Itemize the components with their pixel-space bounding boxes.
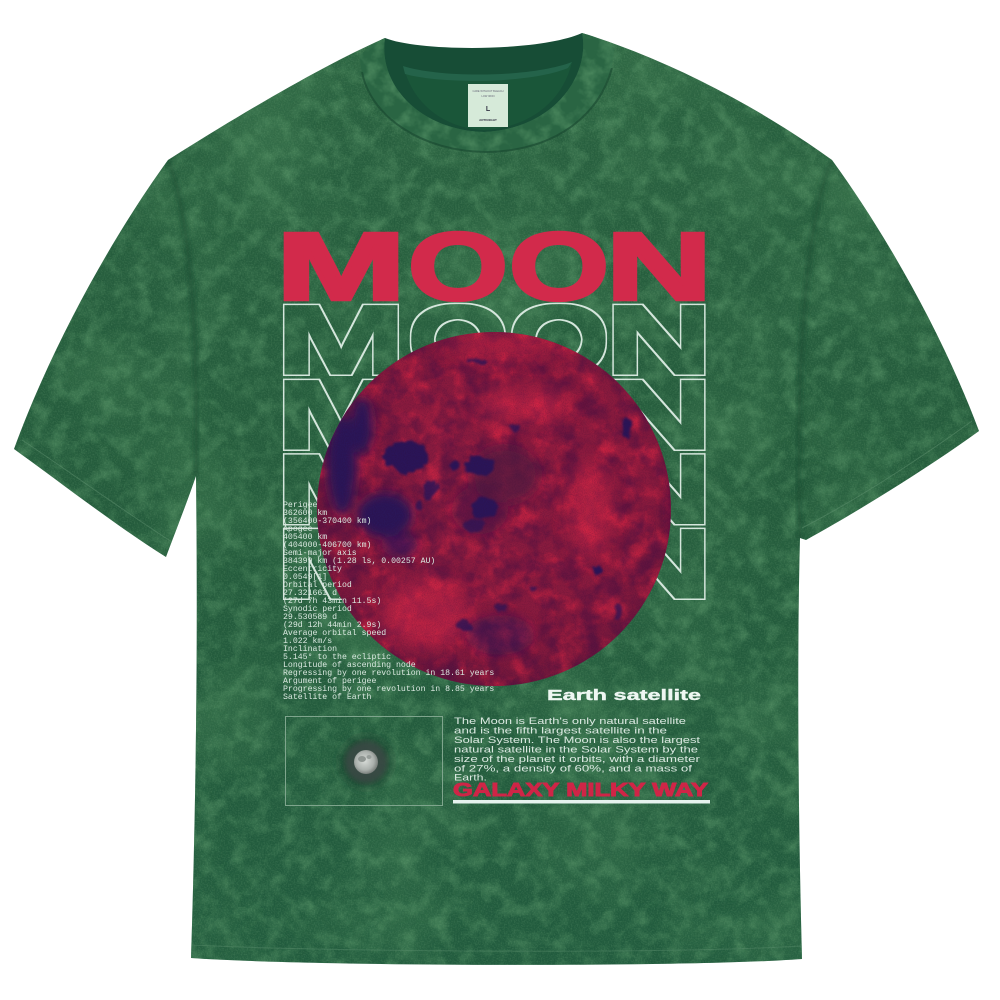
white rule [453, 800, 710, 804]
orbital data text: Progressing by one revolution in 8.85 years [283, 684, 494, 694]
orbital data text: Apogee [283, 525, 313, 534]
orbital data text: 1.022 km/s [283, 636, 332, 646]
size label: L [486, 106, 491, 113]
bright highlands [380, 335, 610, 649]
orbital data text: (356400-370400 km) [283, 516, 371, 526]
description paragraph: natural satellite in the Solar System by the [454, 744, 698, 756]
orbital data text: (27d 7h 43min 11.5s) [283, 596, 381, 606]
orbital data text: Average orbital speed [283, 628, 386, 638]
photo frame with small moon [286, 716, 442, 806]
outlined MOON stack: O [408, 437, 508, 543]
orbital data text [283, 500, 494, 702]
outlined MOON stack: N [606, 512, 712, 618]
outlined MOON stack: M [276, 437, 406, 543]
orbital data text: Semi-major axis [283, 548, 357, 558]
collar seam [362, 68, 612, 152]
title: red MOON: M [276, 214, 406, 320]
outlined MOON stack [276, 288, 712, 618]
orbital data text: 29.530589 d [283, 612, 337, 622]
inner back panel [404, 62, 572, 130]
size label: LOW IRON [481, 94, 495, 98]
orbital data text: Orbital period [283, 580, 352, 590]
orbital data text: (29d 12h 44min 2.9s) [283, 620, 381, 630]
orbital data text: Regressing by one revolution in 18.61 years [283, 668, 494, 678]
red moon illustration [310, 325, 730, 695]
title: red MOON: O [408, 214, 508, 320]
icon: small moon with halo [339, 735, 393, 789]
subtitle: GALAXY MILKY WAY: GALAXY MILKY WAY [453, 780, 708, 800]
back collar band [403, 62, 572, 81]
orbital data text: 5.145° to the ecliptic [283, 652, 391, 662]
outlined MOON stack: N [606, 437, 712, 543]
orbital data text: 405400 km [283, 532, 327, 542]
description paragraph [454, 716, 700, 784]
outlined MOON stack: O [408, 288, 508, 394]
description paragraph: size of the planet it orbits, with a diameter [454, 754, 700, 765]
outlined MOON stack: O [408, 362, 508, 468]
orbital data text: Synodic period [283, 604, 352, 614]
size label: CARE WITHOUT BLEACH [472, 89, 504, 93]
outlined MOON stack: M [276, 362, 406, 468]
description paragraph: of 27%, a density of 60%, and a mass of [454, 764, 693, 774]
orbital data text: Perigee [283, 500, 317, 510]
orbital data text: 0.0549[1] [283, 572, 327, 582]
back neck interior [384, 33, 583, 132]
outlined MOON stack: M [276, 288, 406, 394]
title: red MOON: O [509, 214, 609, 320]
orbital data text: 384399 km (1.28 ls, 0.00257 AU) [283, 556, 435, 566]
orbital data text: 27.321661 d [283, 588, 337, 598]
orbital data text: Eccentricity [283, 564, 342, 574]
description paragraph: Solar System. The Moon is also the largest [454, 735, 700, 746]
outlined MOON stack: O [509, 362, 609, 468]
title: red MOON [276, 214, 712, 320]
orbital data text: (404000-406700 km) [283, 540, 371, 550]
outlined MOON stack: N [606, 362, 712, 468]
outlined MOON stack: N [606, 288, 712, 394]
outlined MOON stack: O [509, 512, 609, 618]
outlined MOON stack: O [408, 512, 508, 618]
outlined MOON stack: M [276, 512, 406, 618]
heading: Earth satellite: Earth satellite [547, 687, 701, 704]
outlined MOON stack: O [509, 288, 609, 394]
orbital data text: Satellite of Earth [283, 692, 372, 702]
orbital data text: Longitude of ascending node [283, 660, 416, 670]
size label: ARTKNIGHT [479, 118, 497, 122]
outlined MOON stack: O [509, 437, 609, 543]
orbital data text: 362600 km [283, 508, 327, 518]
description paragraph: Earth. [454, 772, 487, 784]
orbital data text: Argument of perigee [283, 676, 376, 686]
description paragraph: The Moon is Earth's only natural satellite [454, 716, 686, 727]
orbital data text: Inclination [283, 644, 337, 654]
title: red MOON: N [606, 214, 712, 320]
collar ribbing [355, 30, 620, 155]
dark maria [320, 357, 671, 660]
description paragraph: and is the fifth largest satellite in the [454, 726, 667, 736]
size label [468, 84, 508, 127]
